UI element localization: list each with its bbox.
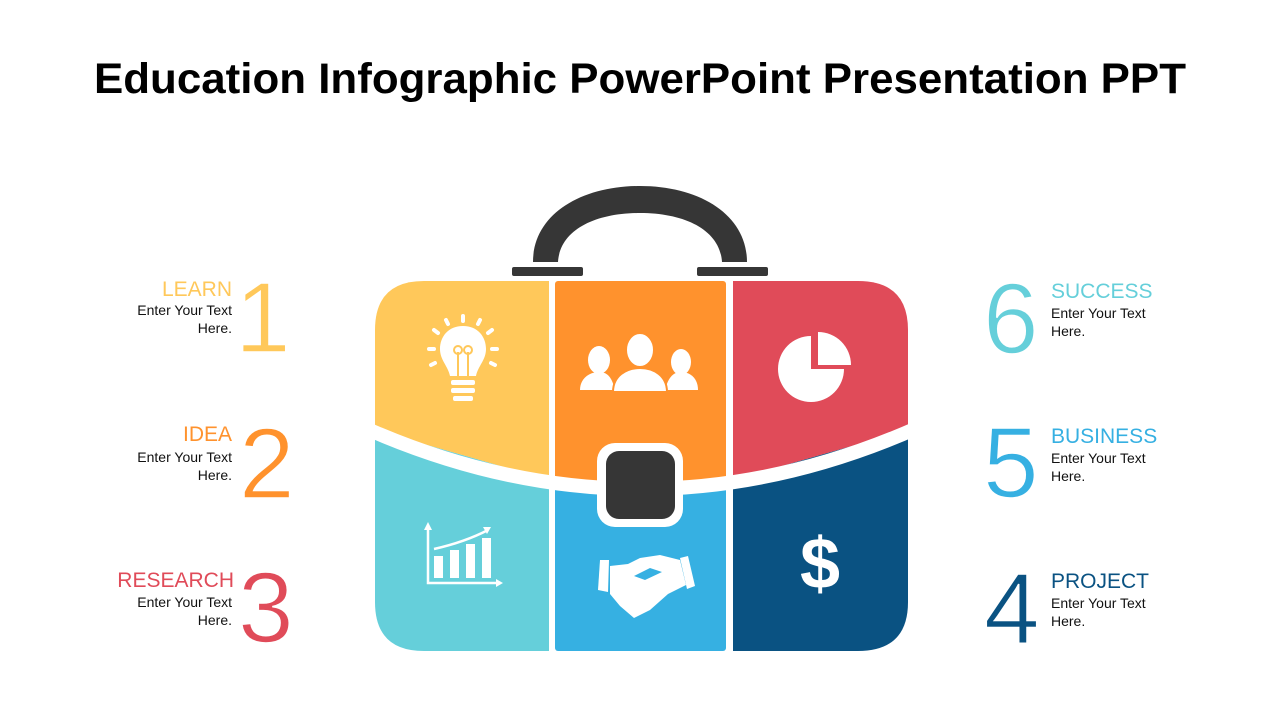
item 5: business: Enter Your Text	[1051, 450, 1146, 466]
panel: business (navy)	[733, 430, 908, 651]
icon: bar chart growth	[424, 522, 503, 587]
item 2: idea: 2	[239, 408, 295, 520]
icon: pie chart	[778, 332, 851, 402]
item 5: business: Here.	[1051, 468, 1085, 484]
item 6: success	[983, 263, 1153, 375]
item 6: success: Enter Your Text	[1051, 305, 1146, 321]
item 3: research	[117, 552, 294, 664]
divider curve	[365, 428, 917, 489]
item 1: learn	[137, 262, 291, 374]
item 5: business	[983, 407, 1157, 519]
item 4: project: Enter Your Text	[1051, 595, 1146, 611]
item 6: success: SUCCESS	[1051, 280, 1153, 303]
item 3: research: 3	[238, 552, 294, 664]
clasp	[597, 443, 683, 527]
item 4: project: PROJECT	[1051, 570, 1149, 593]
icon: handshake	[598, 555, 695, 618]
panel: idea (orange)	[555, 281, 726, 484]
item 3: research: Enter Your Text	[137, 594, 232, 610]
item 1: learn: Enter Your Text	[137, 302, 232, 318]
panel: success (red)	[733, 281, 908, 480]
title: Education Infographic PowerPoint Presentation PPT	[94, 55, 1186, 103]
item 1: learn: 1	[235, 262, 291, 374]
icon: dollar: $	[800, 524, 840, 604]
briefcase	[365, 186, 917, 651]
icon: people	[580, 333, 698, 392]
item 5: business: BUSINESS	[1051, 425, 1157, 448]
item 2: idea: Enter Your Text	[137, 449, 232, 465]
panel: collaboration (blue)	[555, 484, 726, 651]
item 4: project: Here.	[1051, 613, 1085, 629]
panel: research (teal)	[375, 430, 549, 651]
item 1: learn: LEARN	[162, 278, 232, 301]
item 2: idea: IDEA	[183, 423, 232, 446]
item 6: success: Here.	[1051, 323, 1085, 339]
item 6: success: 6	[983, 263, 1039, 375]
item 1: learn: Here.	[198, 320, 232, 336]
panel: learn (yellow)	[375, 281, 549, 480]
handle	[512, 186, 768, 276]
icon: light bulb	[429, 316, 497, 401]
item 4: project	[984, 553, 1149, 665]
item 4: project: 4	[984, 553, 1040, 665]
item 2: idea	[137, 408, 295, 520]
item 3: research: RESEARCH	[117, 569, 234, 592]
item 2: idea: Here.	[198, 467, 232, 483]
item 3: research: Here.	[198, 612, 232, 628]
item 5: business: 5	[983, 407, 1039, 519]
